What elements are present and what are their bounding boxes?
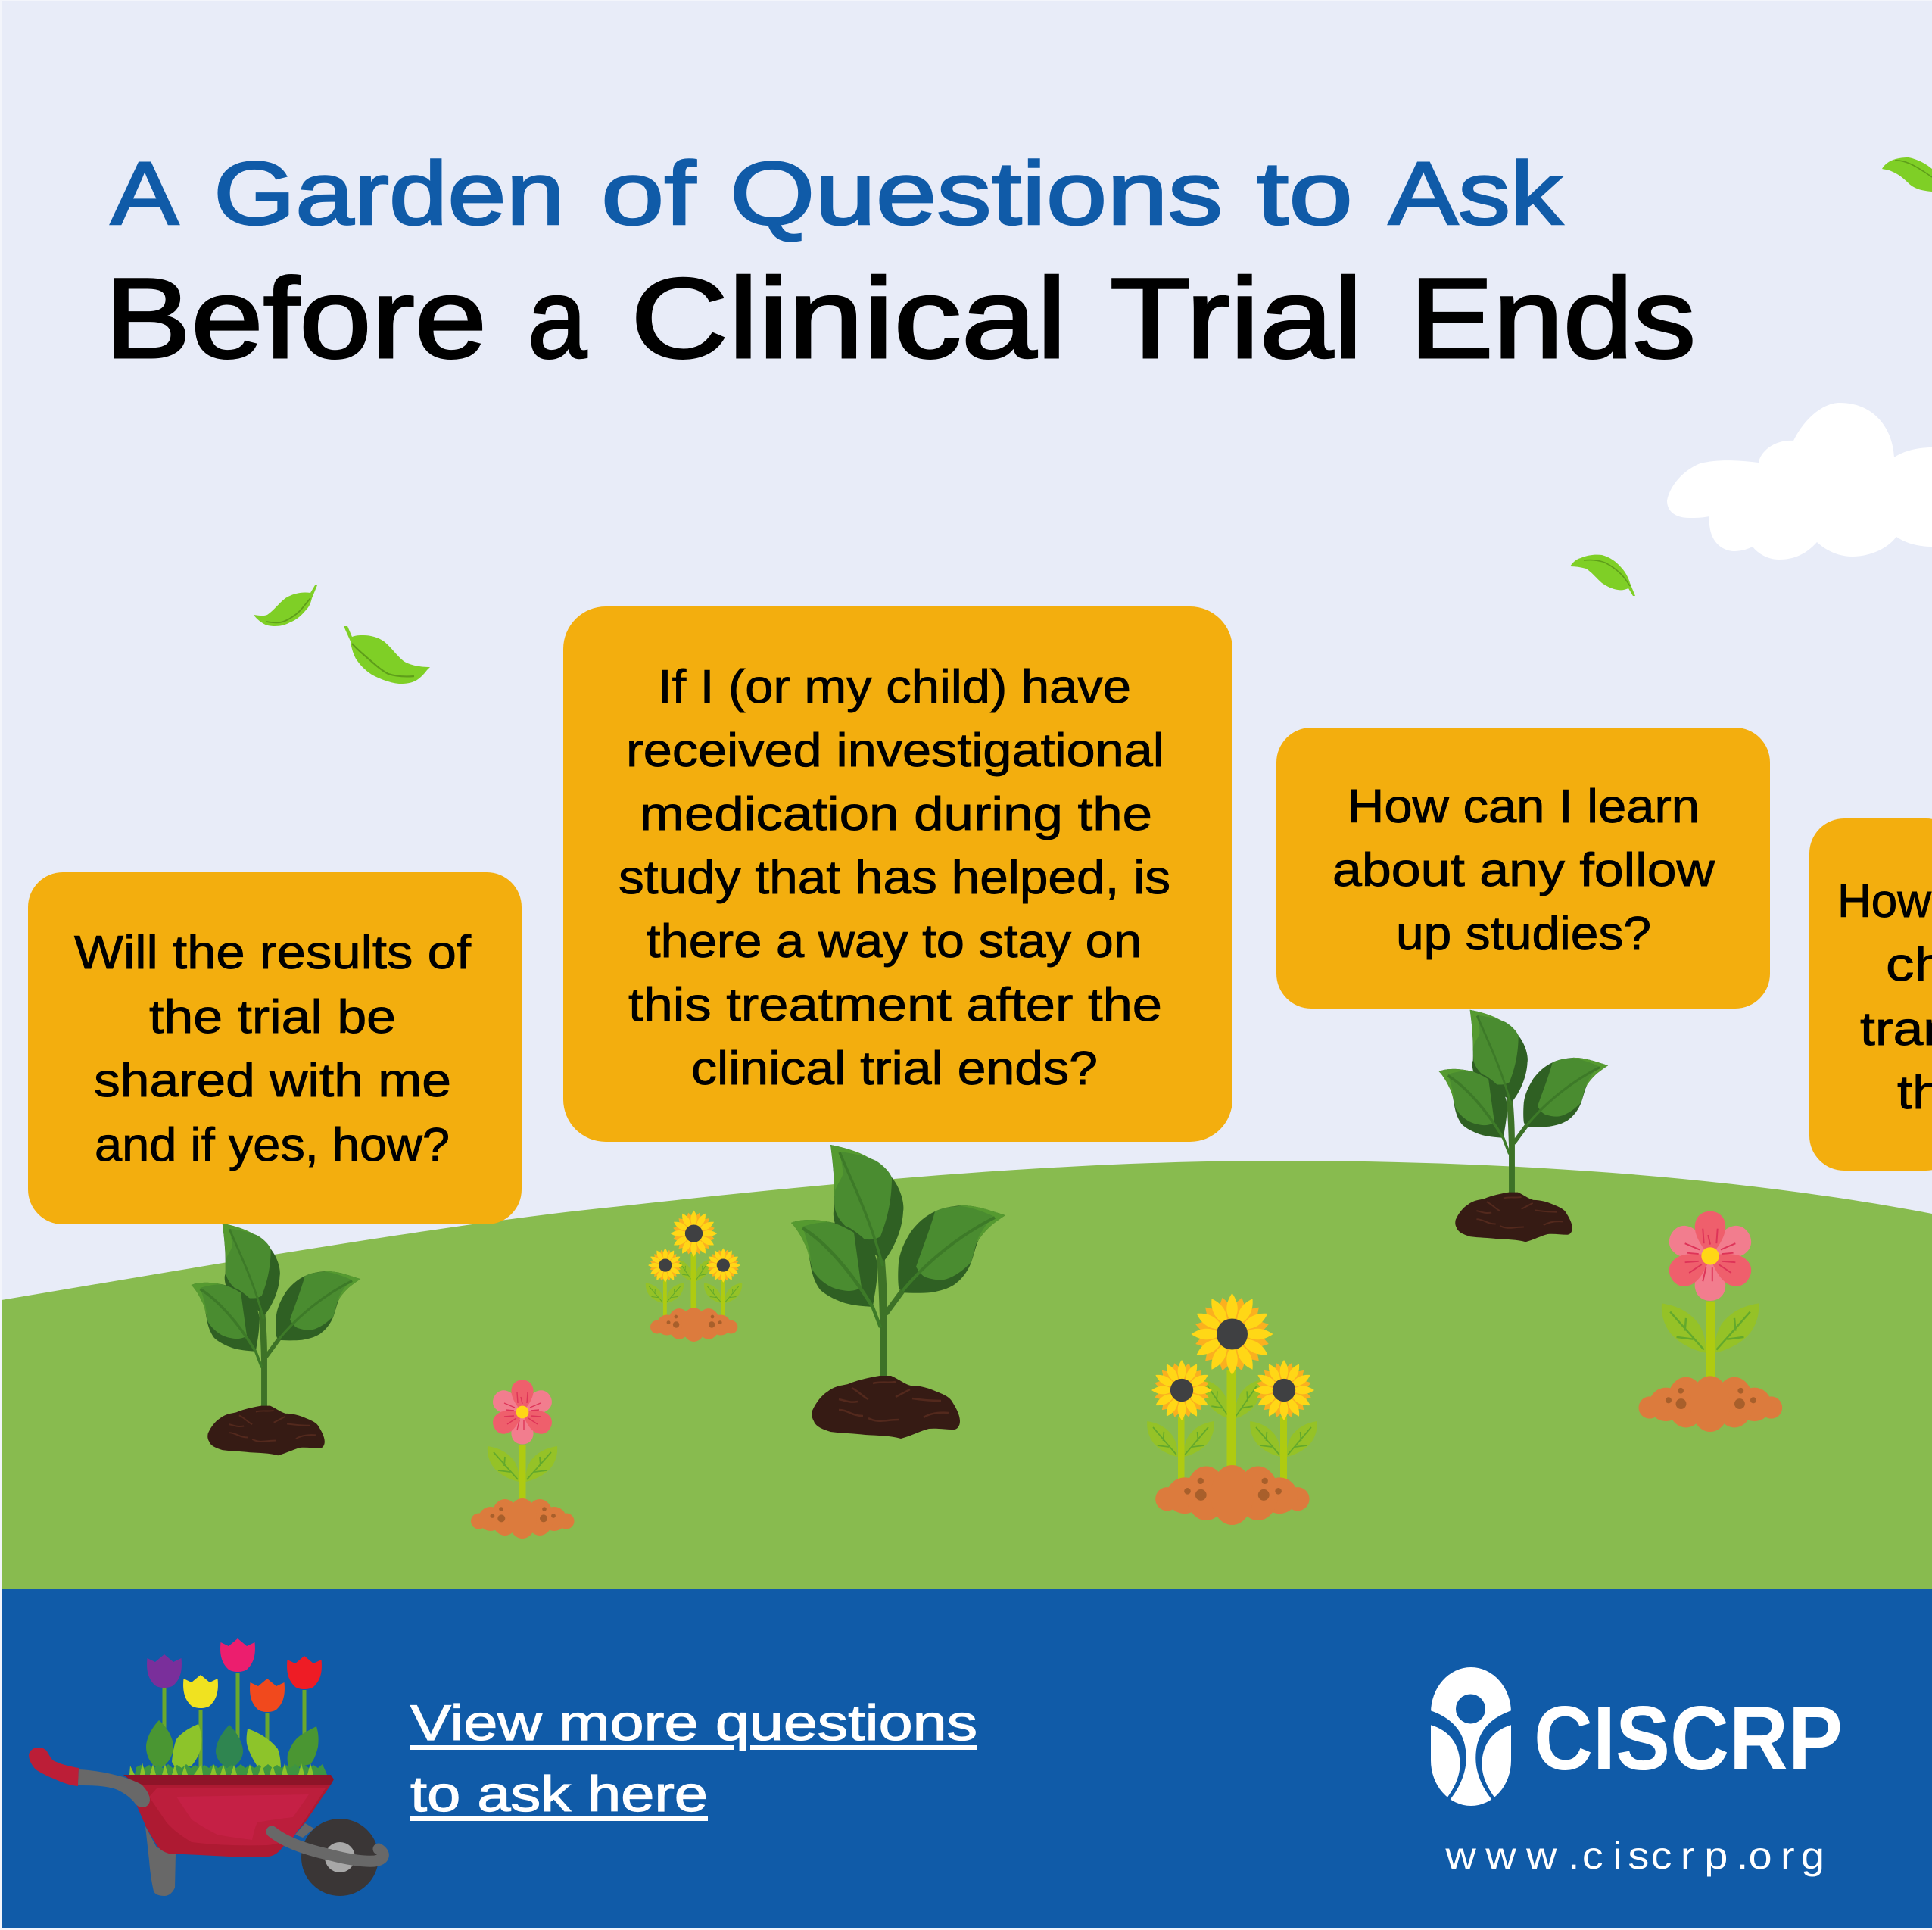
plant: centre large seedling	[791, 1145, 1005, 1439]
link text	[410, 1695, 977, 1822]
logo: CISCRP	[1430, 1667, 1843, 1806]
title line 2: Before	[104, 254, 487, 382]
question box 2: received investigational	[626, 725, 1164, 777]
falling leaf: under cloud	[1570, 555, 1635, 596]
back leg	[145, 1826, 176, 1896]
plant: left seedling	[192, 1224, 360, 1455]
falling leaf: top right	[1882, 157, 1932, 192]
link text: to ask here	[410, 1766, 708, 1822]
question box 3: up studies?	[1396, 908, 1651, 960]
title line 1: of	[601, 144, 696, 244]
cloud	[1667, 403, 1932, 560]
axle arm	[272, 1832, 383, 1861]
flower: small pink	[471, 1380, 574, 1539]
title line 2: a	[528, 254, 587, 382]
question box 1	[28, 872, 522, 1224]
plant: right seedling	[1439, 1010, 1608, 1242]
tub	[134, 1785, 331, 1857]
title line 1: Garden	[213, 144, 565, 244]
flower: large pink	[1638, 1211, 1782, 1432]
logo wordmark: CISCRP	[1534, 1688, 1843, 1789]
question box 1: and if yes, how?	[95, 1119, 450, 1171]
question box 2: this treatment after the	[628, 979, 1162, 1031]
title	[104, 144, 1696, 382]
title line 1: to	[1257, 144, 1353, 244]
logo mark	[1430, 1667, 1512, 1806]
question box 2: medication during the	[640, 788, 1152, 840]
question box 4 (cropped at edge)	[1809, 818, 1932, 1171]
question box 3: about any follow	[1332, 844, 1715, 896]
question box 2	[563, 606, 1232, 1142]
tulip heads	[147, 1638, 322, 1712]
link text: View more questions	[410, 1695, 977, 1751]
question box 1: the trial be	[149, 991, 396, 1043]
title line 1: A	[111, 144, 179, 244]
question box 4 (cropped at edge): How	[1837, 875, 1931, 928]
falling leaf: small left	[254, 585, 317, 626]
sunflowers: large cluster	[1147, 1293, 1317, 1525]
wheel strut	[295, 1823, 314, 1838]
title line 1: Ask	[1388, 144, 1563, 244]
question box 2: there a way to stay on	[647, 915, 1142, 968]
website URL: www.ciscrp.org	[1444, 1835, 1824, 1877]
title line 2: Clinical	[631, 254, 1067, 382]
tub rim	[123, 1775, 334, 1785]
question box 2: study that has helped, is	[619, 852, 1170, 904]
grass	[129, 1763, 327, 1775]
tulip stems	[164, 1673, 304, 1768]
title line 1: Questions	[730, 144, 1223, 244]
wheel	[301, 1819, 379, 1896]
title line 1	[111, 144, 1563, 244]
hill	[2, 1161, 1932, 1590]
falling leaf: large left	[344, 626, 430, 684]
question box 3	[1276, 728, 1770, 1009]
wheelbarrow with tulips	[29, 1638, 383, 1896]
sunflowers: small cluster	[646, 1210, 742, 1342]
handle arm	[78, 1769, 150, 1807]
question box 1: shared with me	[94, 1055, 451, 1107]
title line 2: Ends	[1410, 254, 1696, 382]
question box 2: If I (or my child) have	[658, 661, 1131, 713]
question box 1: Will the results of	[74, 927, 472, 979]
tulip leaves	[146, 1720, 319, 1769]
title line 2	[104, 254, 1696, 382]
title line 2: Trial	[1110, 254, 1363, 382]
question box 3: How can I learn	[1348, 781, 1700, 833]
footer band	[2, 1589, 1932, 1928]
question box 2: clinical trial ends?	[691, 1043, 1098, 1095]
handle grip	[29, 1748, 79, 1786]
